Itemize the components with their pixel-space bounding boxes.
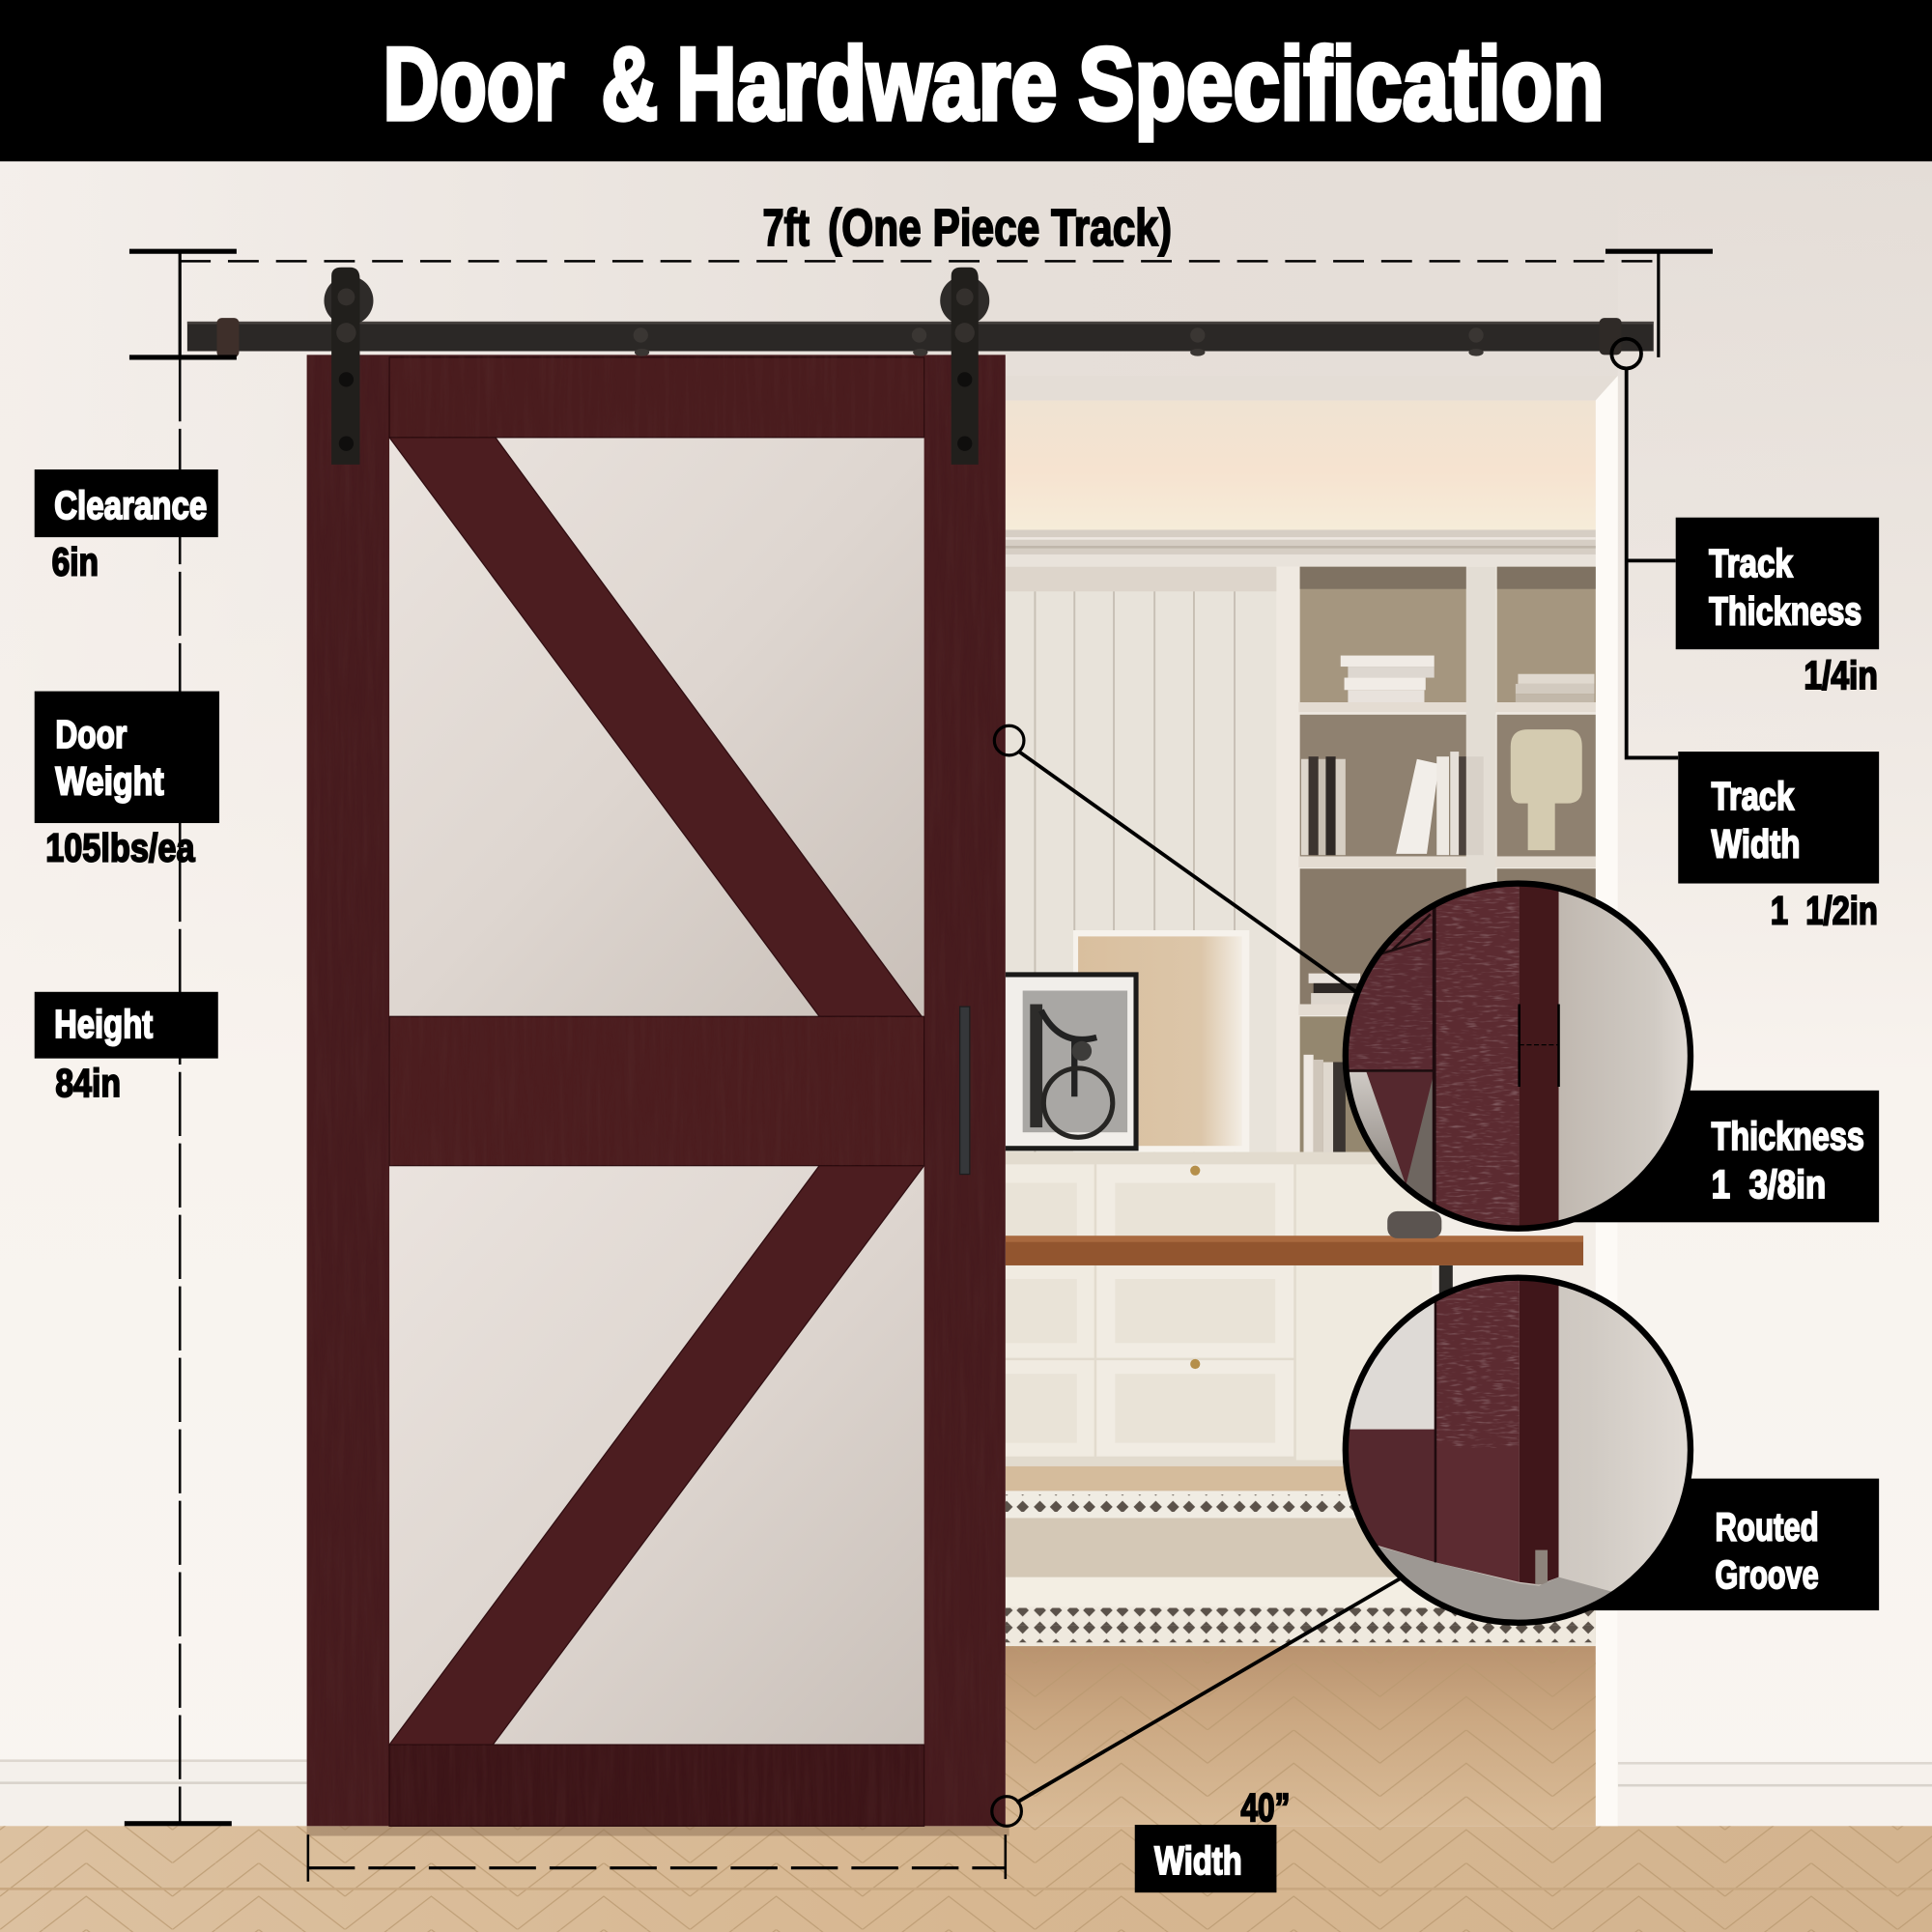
clearance label [35,469,218,584]
door frame body [307,355,1006,1826]
text: thickness: Thickness [1712,1114,1864,1158]
leader line to detail circle two [1016,1576,1405,1803]
track length dimension [129,200,1713,357]
right stopper [1600,318,1622,355]
dashed dimension line [180,260,1659,262]
routed groove label box [1540,1479,1879,1610]
upper diagonal brace [389,438,922,1016]
crown moulding [1006,529,1596,567]
upper glass panel [389,438,924,1016]
bicycle photo [1006,972,1139,1151]
books [1301,656,1595,1152]
height label [35,992,218,1105]
text: width: Width [1154,1838,1242,1883]
room floor and rug [1006,1466,1596,1826]
detail circle: routed groove [1343,1275,1694,1633]
text: groove: Groove [1716,1552,1819,1597]
beige art print [1073,930,1249,1152]
small marker circle on door bottom [992,1797,1021,1826]
title bar [0,0,1932,161]
title word: hardware: Hardware [676,26,1057,142]
title word: ampersand: & [601,26,658,142]
track length description: (One Piece Track) [828,200,1172,257]
detail circle: door thickness [1343,881,1694,1233]
lower glass panel [389,1166,924,1745]
text: clearance value: 6in [52,540,99,584]
text: width: Width [1712,822,1801,867]
track length value: 7ft [763,200,810,257]
text: height value: 84in [55,1061,121,1105]
panelled wall [1006,567,1276,1158]
door frame jamb [1596,376,1618,1826]
leader line to detail circle one [1019,752,1358,993]
middle rail [389,1016,924,1166]
door width dimension [308,1834,1006,1882]
width label [1135,1785,1290,1892]
text: track: Track [1712,774,1794,818]
track bolts [634,327,1484,356]
sculpture [1511,729,1582,850]
bookshelf [1276,567,1596,1158]
cup [1387,1211,1441,1238]
text: weight value: 105lbs/ea [45,826,195,870]
title word: door: Door [384,26,564,142]
text: routed: Routed [1716,1504,1819,1548]
left hanger [324,268,373,465]
barn door [307,355,1006,1826]
bottom rail [389,1745,924,1826]
text: track width value: 1 1/2in [1771,889,1878,933]
text: clearance: Clearance [54,483,207,527]
title word: specification: Specification [1078,26,1605,142]
text: thickness value: 1 3/8in [1712,1162,1826,1207]
wood floor [0,1826,1932,1932]
left stopper [216,318,239,357]
text: thickness: Thickness [1709,589,1861,634]
table top [1006,1236,1583,1302]
text: track: Track [1709,541,1793,585]
track thickness label [1676,518,1879,697]
door weight label [35,692,219,870]
small marker circle on door edge [994,725,1024,755]
text: width value: 40” [1240,1785,1290,1830]
door handle [960,1007,970,1175]
right hanger [940,268,989,465]
text: weight: Weight [55,759,164,804]
baseboard [0,1759,1932,1826]
ceiling glow [1006,401,1596,529]
text: door: Door [55,712,127,756]
door height dimension line [125,357,232,1826]
top rail [389,357,924,438]
cabinets [1006,1152,1432,1466]
thickness label box [1565,1091,1879,1222]
text: track thickness value: 1/4in [1804,653,1878,697]
track end callout lines [1611,339,1678,757]
track width label [1678,752,1879,933]
lower diagonal brace [389,1166,924,1745]
door frame soffit [1006,376,1618,401]
text: height: Height [54,1002,153,1046]
doorway and room interior [1006,376,1618,1826]
sliding track [187,318,1654,357]
